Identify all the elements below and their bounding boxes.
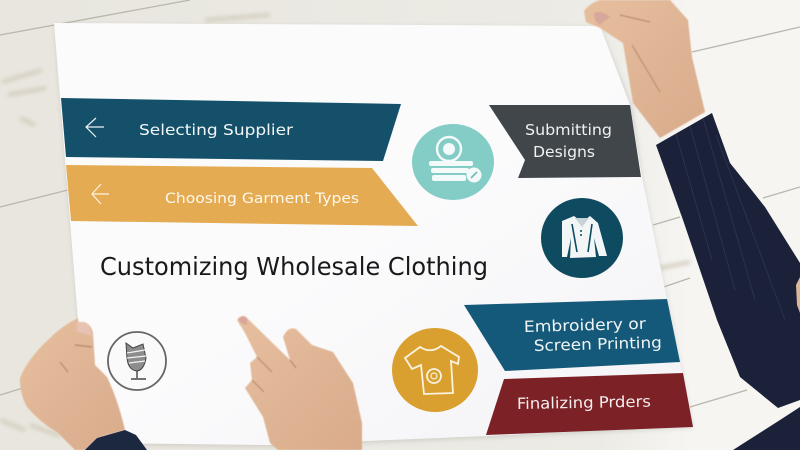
- banner: Choosing Garment Types: Choosing Garment Types: [165, 191, 359, 207]
- icon: left arrow: [86, 118, 104, 137]
- banner: Choosing Garment Types: [66, 165, 418, 226]
- title: Customizing Wholesale Clothing: [100, 252, 488, 281]
- banner: Finalizing Orders: Finalizing Prders: [517, 393, 651, 413]
- left hand holding paper: [20, 318, 125, 450]
- icon: left arrow: [92, 184, 109, 204]
- right hand edge: [796, 277, 800, 313]
- top right hand holding paper: [584, 0, 705, 138]
- banner: Selecting Supplier: Selecting Supplier: [139, 121, 294, 139]
- icon: shirt on dark teal circle: [541, 198, 623, 278]
- banner: Selecting Supplier: [61, 98, 401, 161]
- banner: Finalizing Orders: [486, 373, 693, 435]
- lower right sleeve: [733, 407, 800, 450]
- right hand on paper: [237, 316, 362, 450]
- banner: Submitting Designs: Submitting: [525, 121, 612, 139]
- banner: Submitting Designs: Designs: [533, 143, 595, 161]
- icon: t-shirt on gold circle: [392, 328, 478, 412]
- right sleeve: [656, 113, 800, 408]
- banner: Embroidery or Screen Printing: Embroidery or: [524, 315, 647, 336]
- icon: outlined circle emblem: [108, 332, 166, 390]
- icon: fabric rolls on light teal circle: [412, 124, 494, 200]
- paper sheet: [54, 23, 693, 447]
- banner: Submitting Designs: [489, 105, 641, 178]
- banner: Embroidery or Screen Printing: Screen Printing: [534, 334, 662, 355]
- left sleeve cuff: [85, 430, 147, 450]
- banner: Embroidery or Screen Printing: [464, 299, 680, 371]
